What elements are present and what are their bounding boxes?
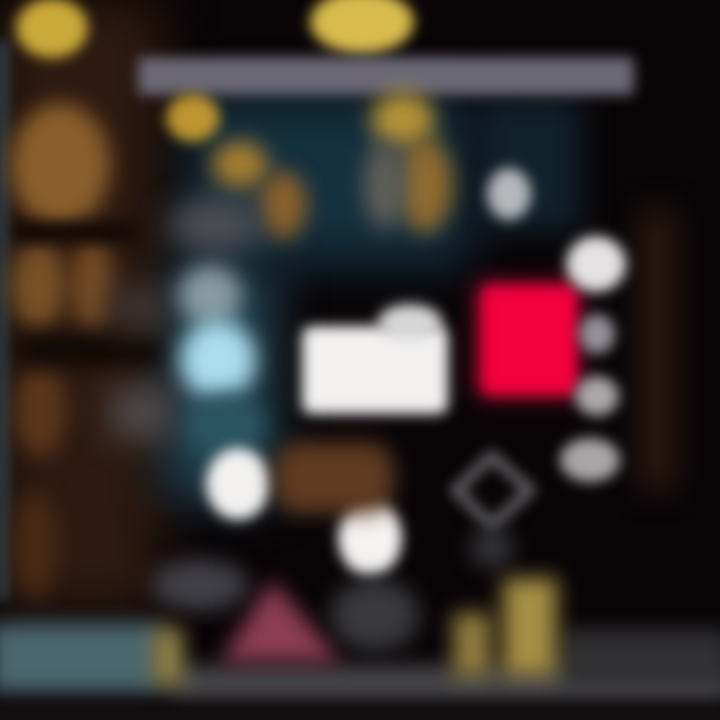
white panel [302,304,448,414]
bottom floor [0,623,720,720]
outlined diamond icon [456,456,530,568]
hanging lamps [166,92,453,253]
red square [474,280,582,400]
bottom objects [152,559,557,686]
white circles [206,168,626,576]
brown block [274,442,394,514]
left shelf with warm objects [10,103,175,599]
ceiling lights [16,0,414,58]
title bar [138,57,634,95]
light blue bottle [178,265,265,457]
